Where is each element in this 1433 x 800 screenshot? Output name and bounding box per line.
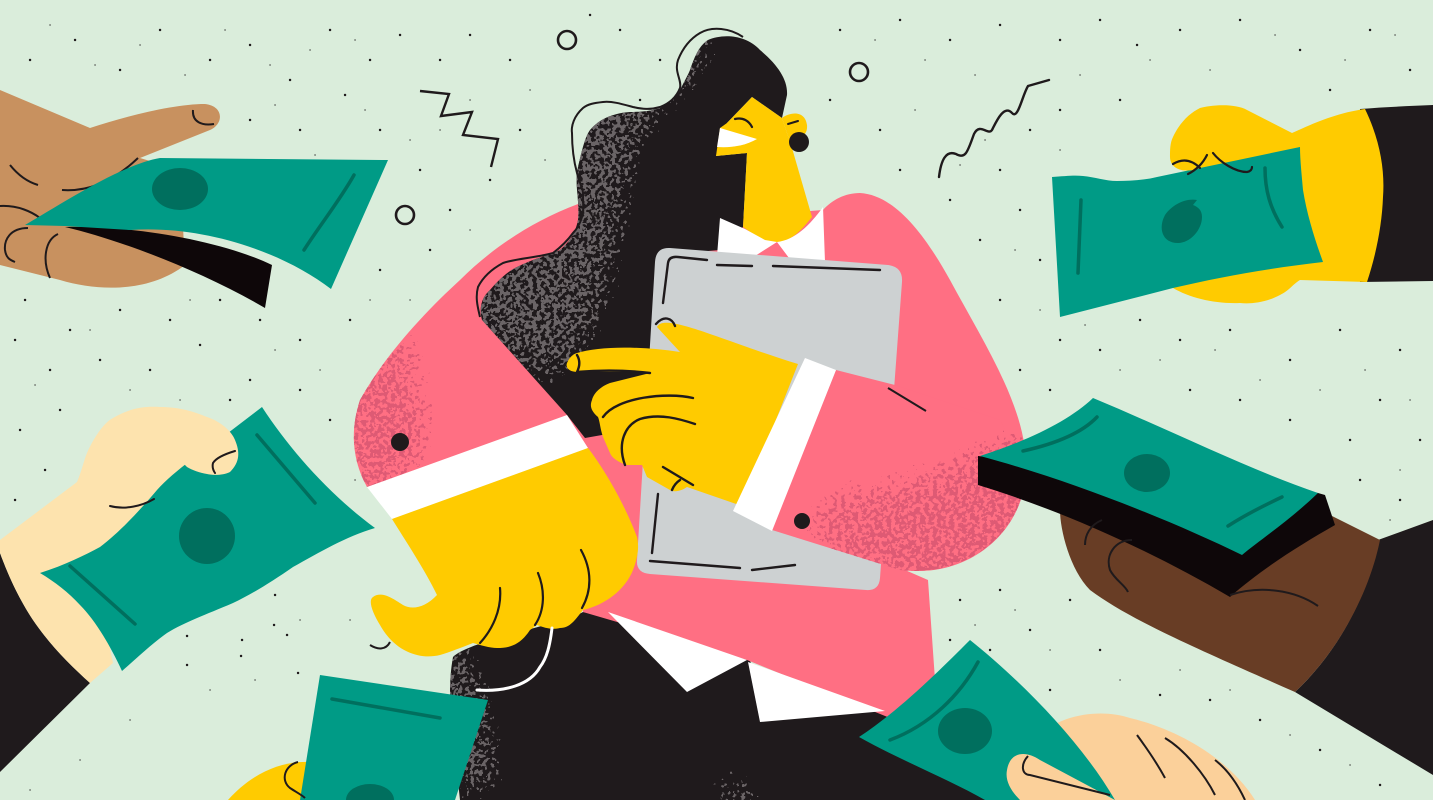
- money: left: [40, 407, 375, 671]
- hair: [480, 36, 788, 438]
- money: bottom right: [859, 640, 1115, 800]
- hand: top left brown: [0, 90, 388, 308]
- left hand: [371, 448, 638, 656]
- money: right: [978, 398, 1335, 597]
- left cuff: [367, 415, 588, 519]
- shirt tail: [608, 612, 885, 722]
- cream thumb: [110, 417, 238, 508]
- skirt: [420, 612, 990, 800]
- woman: [354, 28, 1024, 800]
- collar: [717, 207, 825, 262]
- right hand on tablet: [567, 318, 836, 531]
- hand: top right yellow: [1052, 105, 1433, 317]
- hair strand outline: [477, 29, 743, 317]
- left sleeve button: [391, 433, 409, 451]
- money: bottom left: [300, 675, 488, 800]
- money: top left: [25, 158, 388, 308]
- right sleeve: [772, 370, 1022, 571]
- decorative circles: [396, 31, 868, 224]
- zigzag line: [420, 91, 498, 167]
- hand: right brown with black wallet: [978, 398, 1433, 775]
- money: top right: [1052, 147, 1323, 317]
- hand: left cream: [0, 407, 375, 772]
- hand: bottom right peach with money: [859, 640, 1255, 800]
- left sleeve grain: [354, 335, 432, 487]
- small curve near thumb: [370, 642, 390, 648]
- thumb knuckles: [1172, 140, 1252, 174]
- shirt body: [354, 193, 1026, 718]
- squiggle line: [939, 80, 1049, 177]
- hand: bottom left with money: [228, 675, 488, 800]
- white strap: [477, 628, 552, 690]
- tablet: [637, 248, 902, 590]
- face: [716, 97, 812, 242]
